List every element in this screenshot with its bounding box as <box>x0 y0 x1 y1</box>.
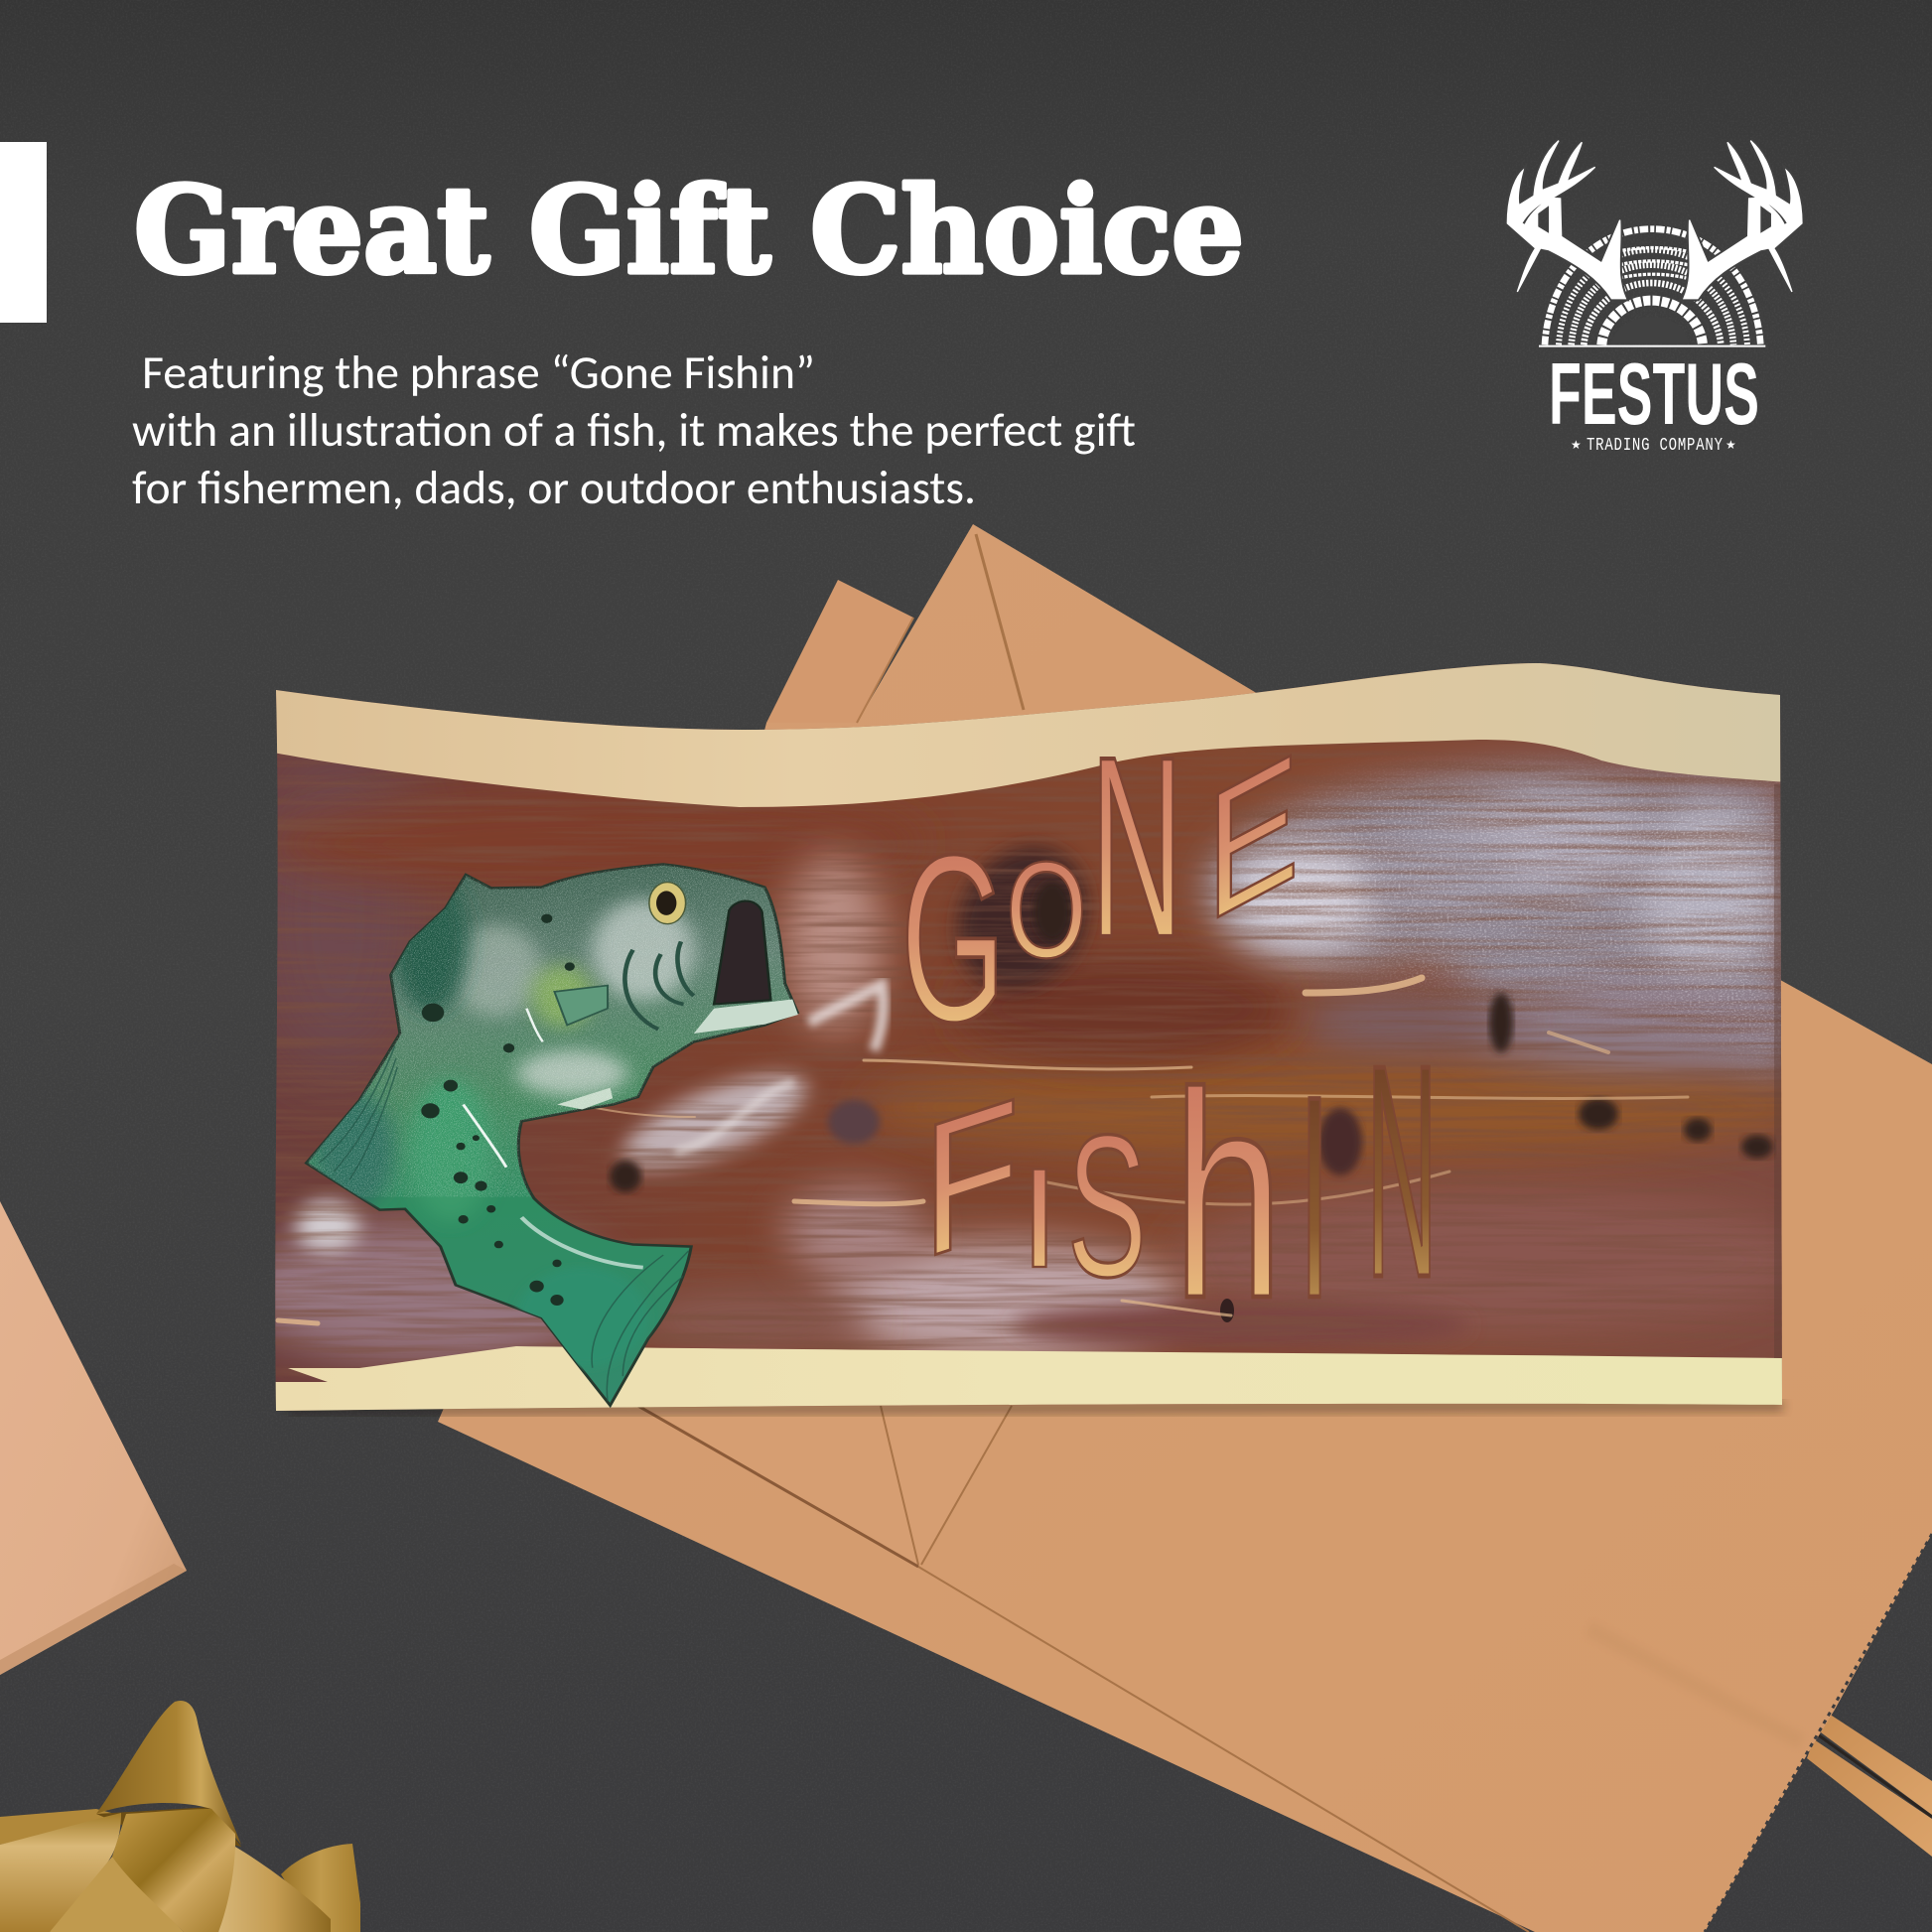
leaping green fish <box>306 862 798 1406</box>
main bag sheet <box>438 524 1932 1932</box>
pectoral fin <box>554 986 608 1026</box>
bag handles <box>1807 1714 1932 1857</box>
sapwood bottom band <box>276 1346 1782 1411</box>
carved lettering: Gone: G <box>900 805 1006 1072</box>
carved lettering: Gone: N <box>1090 703 1183 992</box>
back left ribbon <box>0 1809 126 1845</box>
lavender sheen, upper right <box>1201 769 1787 1077</box>
fish shading and highlights <box>309 862 795 1401</box>
carved lettering: Fishin: I <box>1021 1139 1058 1297</box>
wood slab <box>238 645 1817 1420</box>
front fold shadow line <box>622 1397 1529 1932</box>
logo tagline: TRADING COMPANY <box>1587 434 1723 456</box>
gold ribbon bow <box>0 1701 360 1932</box>
wood colour patches <box>238 745 1817 1360</box>
eye <box>649 883 686 924</box>
serrated bag edge <box>1705 1534 1932 1932</box>
logo emblem <box>1507 141 1802 346</box>
carved lettering: Fishin: S <box>1067 1094 1147 1319</box>
dark fish spots <box>421 914 575 1306</box>
dark cavity under cone <box>96 1807 241 1847</box>
kraft paper bag <box>438 524 1932 1932</box>
dark stain around letter O <box>947 840 1098 997</box>
center reflections <box>611 1055 819 1188</box>
light speckle on sheen <box>1231 779 1787 1062</box>
sapwood top band <box>276 663 1781 807</box>
dark bark edge, right <box>1774 784 1782 1358</box>
logo right star: ★ <box>1725 438 1736 452</box>
white accent bar <box>0 142 47 323</box>
center hollow <box>1611 317 1690 344</box>
carved lettering: Fishin: I <box>1298 1037 1331 1359</box>
inner folded triangle <box>622 1397 1012 1567</box>
grain overlay <box>276 755 1782 1360</box>
carved lettering: Fishin: h <box>1173 1033 1284 1359</box>
description text: Featuring the phrase “Gone Fishin” <box>142 344 815 401</box>
silver speckle <box>309 862 795 1196</box>
front left loop <box>0 1813 121 1932</box>
knots <box>610 882 1773 1322</box>
carved lettering: Fishin <box>922 1004 1438 1359</box>
far right loop <box>281 1844 360 1932</box>
open mouth <box>714 901 770 1004</box>
wavy white reflection <box>809 985 884 1050</box>
title: Great Gift Choice <box>134 161 1244 301</box>
carved lettering: Gone <box>900 703 1300 1072</box>
logo wordmark: FESTUS <box>1549 345 1759 443</box>
fold creases <box>622 534 1024 1567</box>
carved lettering: Gone: O <box>1006 833 1087 986</box>
logo left star: ★ <box>1571 438 1582 452</box>
top cone loop <box>96 1701 241 1845</box>
carved lettering: Fishin: F <box>922 1058 1020 1300</box>
light wood streaks <box>278 978 1688 1323</box>
lower jaw <box>694 999 798 1034</box>
gill plate <box>624 941 694 1030</box>
tree ring half disc <box>1539 229 1765 346</box>
logo: Festus Trading Company <box>1507 141 1802 456</box>
fish body <box>306 864 797 1406</box>
right antler <box>1684 141 1802 299</box>
description text: for fishermen, dads, or outdoor enthusiasts. <box>132 459 976 516</box>
back flap <box>766 580 913 723</box>
left antler <box>1507 141 1625 299</box>
plaque drop shadow <box>288 1400 1783 1416</box>
gift box corner <box>0 1201 187 1675</box>
lower center fold <box>50 1857 184 1932</box>
wooden plaque <box>238 645 1817 1420</box>
description text: with an illustration of a fish, it makes the perfect gift <box>132 401 1136 459</box>
right loop <box>218 1847 331 1932</box>
carved lettering: Gone: E <box>1206 712 1300 961</box>
soft crease near handle <box>1588 1628 1802 1742</box>
description text <box>132 344 1136 516</box>
center loop <box>112 1809 235 1932</box>
carved lettering: Fishin: N <box>1366 1004 1438 1341</box>
